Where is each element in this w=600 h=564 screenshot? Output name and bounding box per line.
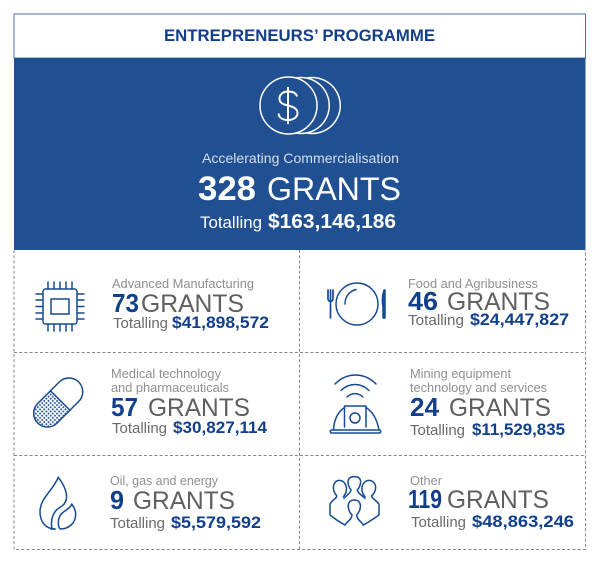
panel: mining equipment xyxy=(330,367,565,439)
grants count: 46 xyxy=(408,286,438,316)
icon: flame xyxy=(40,477,76,529)
category label: Medical technology xyxy=(111,367,222,381)
category label: and pharmaceuticals xyxy=(111,381,229,395)
grants count: 73 xyxy=(112,288,139,318)
total amount xyxy=(200,211,396,233)
panel: other xyxy=(330,474,574,531)
total grants: GRANTS xyxy=(267,171,401,207)
amount: Totalling xyxy=(113,316,168,332)
grants count: GRANTS xyxy=(447,486,549,514)
amount: Totalling xyxy=(411,515,466,531)
grants count: 24 xyxy=(410,392,440,422)
amount xyxy=(408,310,569,329)
panel: total summary xyxy=(14,58,586,250)
subtitle: Accelerating Commercialisation xyxy=(202,150,399,166)
amount xyxy=(410,420,565,439)
amount: Totalling xyxy=(110,516,165,532)
grants count: GRANTS xyxy=(133,487,235,515)
amount xyxy=(411,512,574,531)
amount: $30,827,114 xyxy=(173,418,268,437)
grants count xyxy=(410,392,551,422)
amount: $5,579,592 xyxy=(171,513,261,532)
grants count xyxy=(408,286,550,316)
header panel xyxy=(14,14,586,58)
category label: Food and Agribusiness xyxy=(408,277,538,291)
grants count: 119 xyxy=(408,484,442,514)
amount: $48,863,246 xyxy=(472,512,574,531)
total grants xyxy=(198,170,401,208)
panel: medical technology xyxy=(28,367,268,437)
grants count xyxy=(111,392,250,422)
grants count: GRANTS xyxy=(141,290,244,318)
icon: group of people xyxy=(330,477,379,525)
icon: plate and cutlery xyxy=(328,283,385,325)
amount xyxy=(110,513,261,532)
amount: Totalling xyxy=(410,423,465,439)
grants count: 57 xyxy=(111,392,138,422)
amount xyxy=(113,313,269,332)
panel: food and agribusiness xyxy=(328,277,569,329)
category label xyxy=(111,367,229,395)
total grants: 328 xyxy=(198,170,256,208)
category label: Oil, gas and energy xyxy=(110,474,219,488)
grants count xyxy=(408,484,549,514)
amount xyxy=(112,418,268,437)
total amount: $163,146,186 xyxy=(268,211,396,233)
amount: Totalling xyxy=(112,421,167,437)
panel: oil gas and energy xyxy=(40,474,261,532)
icon: microchip xyxy=(36,282,84,331)
title: ENTREPRENEURS’ PROGRAMME xyxy=(164,27,435,45)
icon: coins xyxy=(260,77,340,134)
amount: $41,898,572 xyxy=(172,313,269,332)
grants count: GRANTS xyxy=(447,288,550,316)
amount: $24,447,827 xyxy=(470,310,569,329)
amount: Totalling xyxy=(408,313,464,329)
icon: hard hat with signal xyxy=(330,375,381,433)
category label xyxy=(410,367,547,395)
amount: $11,529,835 xyxy=(472,420,565,439)
icon: capsule xyxy=(28,372,88,433)
grants count: GRANTS xyxy=(449,394,551,422)
category label: Advanced Manufacturing xyxy=(112,277,254,291)
category label: Mining equipment xyxy=(410,367,512,381)
category label: technology and services xyxy=(410,381,547,395)
panel: advanced manufacturing xyxy=(36,277,269,332)
total amount: Totalling xyxy=(200,214,262,232)
category label: Other xyxy=(410,474,442,488)
grants count: 9 xyxy=(110,485,124,515)
grants count: GRANTS xyxy=(148,394,250,422)
